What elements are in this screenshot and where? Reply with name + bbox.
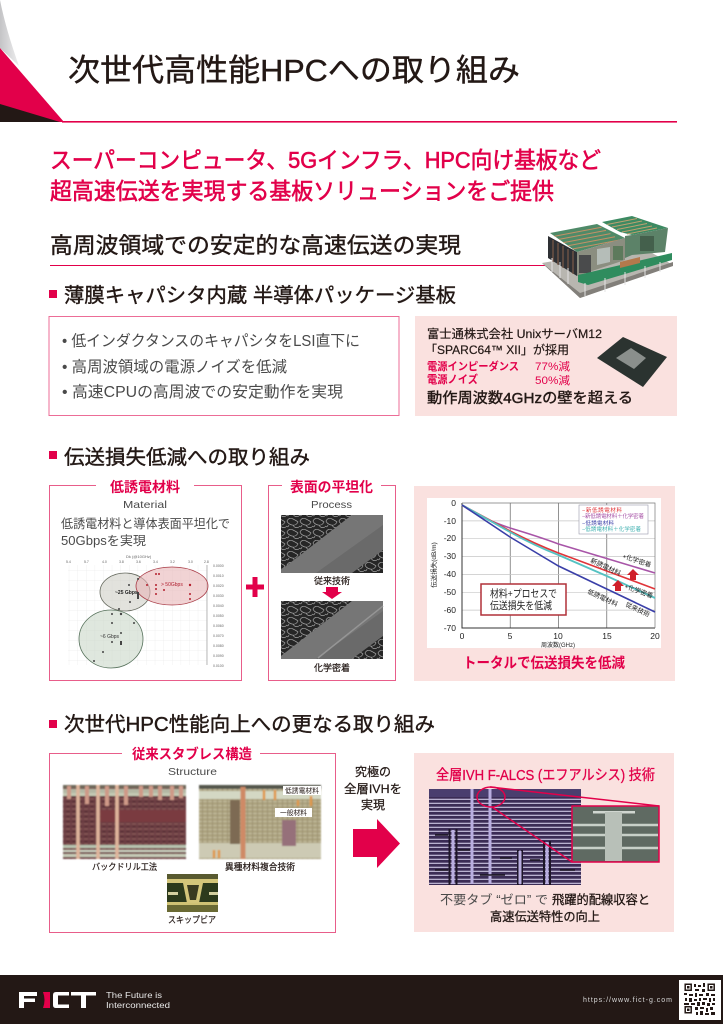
text: realizing full-layer IVH: 全層IVHを bbox=[344, 782, 402, 796]
logo: FICT bbox=[19, 992, 96, 1008]
panel: low dielectric material: 50Gbpsを実現 bbox=[61, 533, 147, 548]
scatter chart: 0.0100 bbox=[213, 664, 224, 668]
scatter chart: 3.6 bbox=[136, 560, 141, 564]
panel: surface flattening bbox=[268, 479, 396, 680]
panel: F-ALCS: 高速伝送特性の向上 bbox=[490, 909, 600, 924]
main heading: 高周波領域での安定的な高速伝送の実現 bbox=[50, 233, 461, 258]
lead text: 超高速伝送を実現する基板ソリューションをご提供 bbox=[50, 178, 554, 204]
scatter chart: 2.8 bbox=[204, 560, 209, 564]
line chart: -50 bbox=[444, 587, 456, 597]
photo: inset magnified via bbox=[572, 806, 659, 862]
scatter chart: 0.0060 bbox=[213, 624, 224, 628]
scatter chart: 3.4 bbox=[153, 560, 158, 564]
lead text: スーパーコンピュータ、5Gインフラ、HPC向け基板など bbox=[50, 147, 601, 173]
panel: low dielectric material: 低誘電材料 bbox=[110, 479, 180, 495]
panel: surface flattening: 従来技術 bbox=[314, 575, 350, 586]
photo: chemical adhesion surface bbox=[281, 601, 383, 659]
panel: capacitor benefits: • 高速CPUの高周波での安定動作を実現 bbox=[62, 383, 344, 401]
photo: server board assembly bbox=[542, 216, 673, 298]
line chart: 0 bbox=[460, 631, 465, 641]
panel: Fujitsu adoption: 「SPARC64™ XII」が採用 bbox=[425, 342, 569, 357]
scatter chart: 0.0080 bbox=[213, 644, 224, 648]
panel: surface flattening: 化学密着 bbox=[314, 662, 350, 673]
line chart: -20 bbox=[444, 533, 456, 543]
scatter chart: 3.2 bbox=[170, 560, 175, 564]
panel: conventional stubless structure: スキップビア bbox=[168, 915, 216, 925]
text: realizing full-layer IVH: 実現 bbox=[361, 798, 385, 812]
heading rule bbox=[50, 265, 545, 266]
icon: plus bbox=[246, 577, 264, 597]
scatter chart bbox=[66, 554, 224, 668]
panel: low dielectric material: Material bbox=[123, 499, 167, 511]
line chart: 0 bbox=[451, 498, 456, 508]
line chart: -10 bbox=[444, 516, 456, 526]
panel: Fujitsu adoption: 電源ノイズ bbox=[427, 372, 478, 386]
scatter chart: 0.0030 bbox=[213, 594, 224, 598]
section heading: next generation HPC: 次世代HPC性能向上への更なる取り組み bbox=[64, 713, 435, 736]
panel: Fujitsu adoption: 50%減 bbox=[535, 373, 570, 387]
photo: hybrid material bbox=[199, 785, 321, 859]
panel: Fujitsu adoption: 77%減 bbox=[535, 359, 570, 373]
legend: −新低誘電材料＋化学密着 bbox=[582, 512, 644, 520]
title: 次世代高性能HPCへの取り組み bbox=[68, 53, 520, 88]
panel: low dielectric material: 低誘電材料と導体表面平坦化で bbox=[61, 516, 230, 531]
scatter chart: ~25 Gbps bbox=[115, 590, 138, 596]
photo: skip via bbox=[167, 874, 218, 912]
line chart: 低誘電材料 bbox=[586, 587, 620, 609]
tagline: The Future is bbox=[106, 991, 162, 1000]
scatter chart: Dk (@10GHz) bbox=[126, 554, 152, 559]
legend bbox=[579, 505, 648, 534]
line chart: 伝送損失(dB/m) bbox=[429, 542, 438, 588]
label: general material: 一般材料 bbox=[280, 808, 307, 817]
legend: −新低誘電材料 bbox=[582, 506, 622, 514]
line chart: -70 bbox=[444, 623, 456, 633]
section heading: transmission loss: 伝送損失低減への取り組み bbox=[64, 446, 310, 469]
panel: total loss reduction: トータルで伝送損失を低減 bbox=[463, 654, 625, 672]
panel: conventional stubless structure: 従来スタブレス構造 bbox=[132, 746, 252, 762]
line chart: +化学密着 bbox=[623, 581, 655, 600]
panel: conventional stubless structure: 異種材料複合技術 bbox=[225, 861, 295, 872]
photo: conventional surface bbox=[281, 515, 383, 573]
scatter chart: 0.0010 bbox=[213, 574, 224, 578]
line chart: 従来技術 bbox=[624, 600, 652, 619]
scatter chart: 0.0070 bbox=[213, 634, 224, 638]
panel: F-ALCS: 不要タブ “ゼロ” で bbox=[440, 892, 548, 907]
panel: surface flattening: Process bbox=[311, 499, 352, 511]
panel: F-ALCS: 全層IVH F-ALCS (エフアルシス) 技術 bbox=[436, 767, 655, 784]
corner decoration bbox=[0, 0, 64, 122]
panel: capacitor benefits bbox=[49, 316, 399, 416]
photo: back drill bbox=[63, 785, 186, 859]
panel: F-ALCS: 飛躍的配線収容と bbox=[552, 892, 650, 907]
label: low dielectric material: 低誘電材料 bbox=[285, 786, 319, 795]
panel: F-ALCS bbox=[414, 753, 674, 932]
scatter chart: 0.0040 bbox=[213, 604, 224, 608]
scatter chart: 5.4 bbox=[66, 560, 71, 564]
panel: capacitor benefits: • 高周波領域の電源ノイズを低減 bbox=[62, 358, 287, 376]
line chart: -60 bbox=[444, 605, 456, 615]
panel: conventional stubless structure: バックドリル工法 bbox=[92, 861, 157, 872]
section heading: capacitor: 薄膜キャパシタ内蔵 半導体パッケージ基板 bbox=[64, 284, 456, 307]
magnifier callout bbox=[477, 787, 659, 862]
text: realizing full-layer IVH bbox=[344, 765, 402, 812]
arrow right bbox=[353, 819, 400, 868]
line chart: 新誘電材料 bbox=[589, 556, 623, 578]
panel: Fujitsu adoption bbox=[415, 316, 677, 416]
scatter chart: 0.0050 bbox=[213, 614, 224, 618]
scatter chart: 3.8 bbox=[119, 560, 124, 564]
legend: −低誘電材料 bbox=[582, 519, 614, 527]
panel: Fujitsu adoption: 富士通株式会社 UnixサーバM12 bbox=[427, 326, 602, 341]
line chart: -30 bbox=[444, 551, 456, 561]
legend: −低誘電材料＋化学密着 bbox=[582, 525, 641, 533]
scatter chart: 3.0 bbox=[188, 560, 193, 564]
arrows up bbox=[612, 569, 639, 591]
panel: Fujitsu adoption: 電源インピーダンス bbox=[427, 359, 519, 373]
line chart: -40 bbox=[444, 569, 456, 579]
scatter chart: > 50Gbps bbox=[161, 582, 183, 588]
panel: capacitor benefits: • 低インダクタンスのキャパシタをLSI直下に bbox=[62, 332, 360, 350]
callout bbox=[481, 584, 566, 615]
title rule bbox=[62, 121, 677, 123]
line chart: 10 bbox=[553, 631, 563, 641]
scatter chart: 5.7 bbox=[84, 560, 89, 564]
line chart: 周波数(GHz) bbox=[541, 641, 575, 649]
scatter chart: 4.0 bbox=[102, 560, 107, 564]
text: realizing full-layer IVH: 究極の bbox=[355, 765, 391, 779]
arrow down bbox=[322, 587, 342, 599]
callout: 材料+プロセスで bbox=[490, 587, 557, 600]
panel: surface flattening: 表面の平坦化 bbox=[290, 479, 373, 495]
website url: https://www.fict-g.com bbox=[583, 997, 672, 1004]
panel: Fujitsu adoption: 動作周波数4GHzの壁を超える bbox=[427, 390, 633, 407]
line chart: 15 bbox=[602, 631, 612, 641]
icon: CPU chip bbox=[597, 337, 667, 387]
tagline: Interconnected bbox=[106, 1001, 170, 1010]
line chart: 5 bbox=[508, 631, 513, 641]
footer bbox=[0, 975, 723, 1024]
line chart: 20 bbox=[650, 631, 660, 641]
panel: total loss reduction bbox=[414, 486, 675, 681]
QR code bbox=[679, 980, 721, 1020]
panel: conventional stubless structure bbox=[50, 746, 336, 932]
line chart: +化学密着 bbox=[621, 551, 653, 569]
lead text bbox=[50, 147, 601, 204]
panel: conventional stubless structure: Structure bbox=[168, 766, 217, 778]
scatter chart: 0.0020 bbox=[213, 584, 224, 588]
callout: 伝送損失を低減 bbox=[490, 599, 552, 612]
photo: cross section bbox=[429, 789, 581, 885]
label: general material bbox=[275, 808, 312, 817]
scatter chart: ~6 Gbps bbox=[100, 634, 120, 640]
scatter chart: 0.0000 bbox=[213, 564, 224, 568]
line chart bbox=[429, 498, 660, 649]
panel: low dielectric material bbox=[50, 479, 242, 680]
scatter chart: 0.0090 bbox=[213, 654, 224, 658]
tagline bbox=[106, 991, 170, 1010]
